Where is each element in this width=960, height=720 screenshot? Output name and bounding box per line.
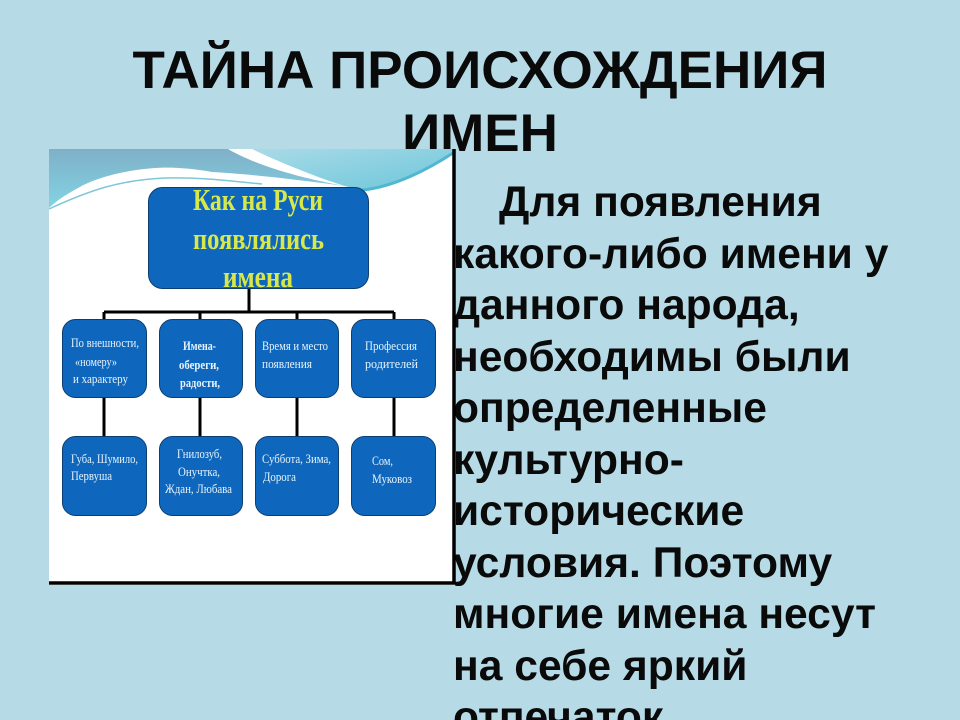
box: protective names: обереги, [179,358,219,372]
picture frame [49,149,454,583]
box: examples 1: Первуша [71,469,112,483]
title [133,39,827,163]
box: time and place [256,320,338,398]
box: parents profession: родителей [365,357,418,371]
picture background [49,149,455,585]
top box: появлялись [193,221,324,256]
box: examples 3 [256,436,338,516]
box: time and place: Время и место [262,339,328,353]
top box: Как на Руси [193,182,323,217]
body text: определенные [453,384,767,432]
body text: исторические [453,487,744,535]
body text: необходимы были [453,333,851,381]
box: examples 2: Ждан, Любава [165,482,232,496]
body text: данного народа, [453,281,800,329]
connector lines [104,288,394,436]
title: ИМЕН [402,104,558,163]
box: examples 4 [352,436,436,516]
box: examples 4: Сом, [372,454,393,468]
body text: на себе яркий [453,642,747,690]
picture wave header [49,149,455,209]
box: protective names: Имена- [183,339,216,353]
top box: имена [223,259,293,294]
panel: diagram picture [49,149,455,585]
body text: Для появления [499,178,822,226]
box: parents profession [352,320,436,398]
title: ТАЙНА ПРОИСХОЖДЕНИЯ [133,39,827,100]
box: examples 2 [160,436,242,516]
body text: условия. Поэтому [453,539,832,587]
box: examples 1 [62,436,146,516]
top box [148,182,368,294]
box: protective names [160,320,242,398]
box: appearance: и характеру [73,372,129,386]
box: appearance: По внешности, [71,336,139,350]
box: examples 2: Гнилозуб, [177,447,222,461]
box: protective names: радости, [180,376,220,390]
body text: культурно- [453,436,684,484]
box: time and place: появления [262,357,312,371]
body text: многие имена несут [453,590,876,638]
box: examples 3: Дорога [263,470,296,484]
box: examples 4: Муковоз [372,472,412,486]
box: appearance: «номеру» [75,355,117,369]
box: appearance [62,320,146,398]
box: examples 2: Онучтка, [178,465,220,479]
box: examples 3: Суббота, Зима, [262,452,331,466]
box: examples 1: Губа, Шумило, [71,452,138,466]
box: parents profession: Профессия [365,339,417,353]
body text: какого-либо имени у [453,230,889,278]
body text [453,178,889,720]
